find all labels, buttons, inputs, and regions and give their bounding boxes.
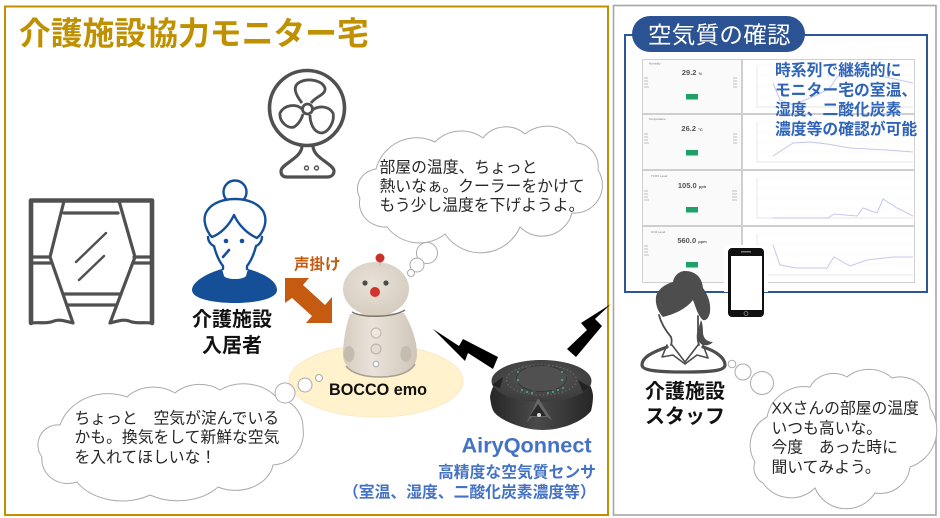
thought bubble: air is stale: かも。換気をして新鮮な空気	[74, 428, 280, 446]
device: AirQ sensor	[490, 360, 593, 430]
thought bubble: resident thinks room is hot: もう少し温度を下げようよ。	[380, 196, 584, 214]
thought bubble: staff reflects on room temperature: XXさんの部屋の温度	[772, 400, 919, 418]
robot: BOCCO emo	[343, 254, 417, 377]
row: temperature: Temperature	[649, 117, 666, 121]
thought bubble: staff reflects on room temperature	[728, 360, 937, 509]
thought bubble: resident thinks room is hot	[358, 126, 602, 276]
heading pill: air quality check	[632, 16, 805, 52]
row: TVOC level	[644, 174, 913, 218]
dashboard screenshot	[642, 59, 915, 283]
icon: elderly resident	[192, 180, 277, 303]
panel: care facility monitor home	[5, 6, 608, 515]
row: humidity: 29.2 %	[682, 68, 703, 77]
base ellipse under robot	[289, 345, 463, 417]
thought bubble: air is stale: を入れてほしいな！	[74, 448, 216, 466]
row: humidity	[644, 62, 913, 105]
icon: care staff	[642, 271, 725, 372]
callout: time-series description: 時系列で継続的に	[775, 62, 901, 80]
callout: time-series description: 濃度等の確認が可能	[775, 120, 917, 138]
icon: wireless link robot to sensor	[433, 329, 498, 369]
callout: time-series description: モニター宅の室温、	[775, 80, 917, 100]
thought bubble: staff reflects on room temperature: 今度 あった時に	[772, 438, 898, 456]
label: resident: 介護施設	[192, 308, 272, 331]
label: BOCCO emo: BOCCO emo	[329, 381, 427, 399]
white backing behind phone	[724, 245, 768, 292]
callout: time-series description	[775, 62, 917, 138]
label: resident: 入居者	[202, 334, 262, 357]
row: TVOC level: TVOC Level	[651, 174, 668, 178]
row: temperature	[644, 117, 913, 156]
row: TVOC level: 105.0 ppb	[678, 181, 707, 190]
label: AiryQonnect: AiryQonnect	[462, 432, 592, 458]
label: voice call: 声掛け	[294, 254, 341, 274]
thought bubble: resident thinks room is hot: 熱いなぁ。クーラーをかけて	[380, 178, 585, 196]
label: staff: 介護施設	[645, 380, 725, 403]
heading pill: air quality check: 空気質の確認	[648, 22, 791, 48]
label: sensor description: （室温、湿度、二酸化炭素濃度等）	[343, 482, 596, 502]
arrow: two-way voice call	[285, 278, 332, 323]
panel: air quality check	[614, 6, 936, 515]
thought bubble: air is stale: ちょっと 空気が淀んでいる	[74, 410, 279, 428]
row: humidity: Humidity	[649, 62, 661, 66]
thought bubble: air is stale	[38, 374, 323, 501]
thought bubble: staff reflects on room temperature: いつも高いな。	[772, 420, 882, 438]
blue frame around dashboard	[625, 35, 927, 292]
row: CO2 level	[644, 230, 913, 268]
icon: electric fan	[270, 70, 344, 177]
row: temperature: 26.2 °C	[681, 124, 703, 133]
icon: smartphone	[728, 248, 764, 317]
label: staff	[645, 380, 725, 428]
heading: care facility monitor home: 介護施設協力モニター宅	[19, 16, 369, 52]
thought bubble: resident thinks room is hot: 部屋の温度、ちょっと	[380, 158, 537, 176]
label: sensor description	[343, 462, 596, 502]
icon: window with curtains	[31, 200, 152, 323]
row: CO2 level: 560.0 ppm	[677, 236, 707, 245]
label: staff: スタッフ	[645, 405, 725, 428]
icon: wireless link sensor to staff	[567, 304, 611, 357]
thought bubble: staff reflects on room temperature: 聞いてみよう。	[772, 460, 881, 476]
callout: time-series description: 湿度、二酸化炭素	[775, 100, 902, 119]
label: resident	[192, 308, 272, 357]
row: CO2 level: CO2 Level	[651, 230, 666, 234]
label: sensor description: 高精度な空気質センサ	[438, 462, 596, 482]
